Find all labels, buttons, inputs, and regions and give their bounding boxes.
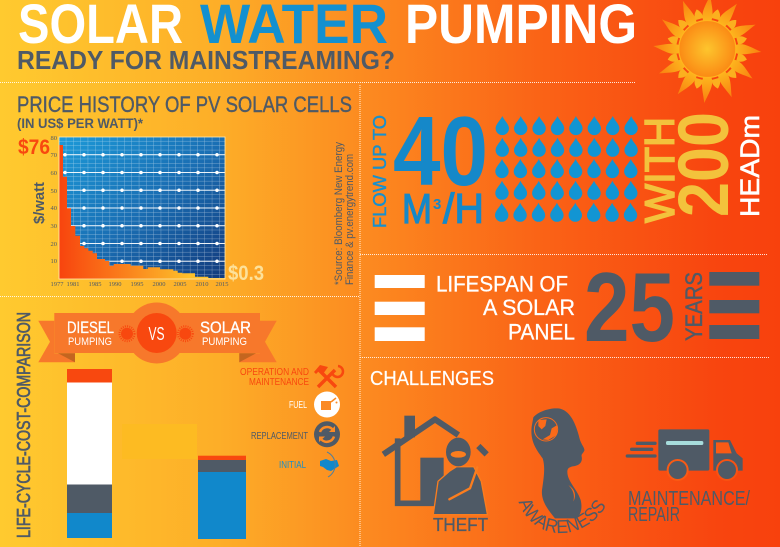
line chart: solar cell price: 1990 bbox=[108, 281, 122, 288]
challenges heading: CHALLENGES bbox=[370, 367, 494, 390]
ribbon: diesel vs solar: VS bbox=[148, 324, 164, 344]
icon: sun bbox=[653, 0, 761, 103]
line chart: solar cell price: 1985 bbox=[88, 281, 102, 288]
line chart: solar cell price: 2000 bbox=[152, 281, 166, 288]
ribbon: diesel vs solar: DIESEL bbox=[67, 319, 114, 337]
ribbon: diesel vs solar: PUMPING bbox=[68, 336, 112, 348]
ribbon: diesel vs solar: SOLAR bbox=[200, 319, 251, 337]
stat: 200: 200 bbox=[665, 112, 744, 217]
line chart: solar cell price: 50 bbox=[50, 188, 57, 195]
decorative grey bars bbox=[709, 272, 759, 339]
lifespan label: LIFESPAN OF bbox=[436, 272, 568, 297]
line chart: solar cell price: 1981 bbox=[66, 281, 80, 288]
line chart: solar cell price: 60 bbox=[50, 170, 57, 177]
line chart: solar cell price: 80 bbox=[50, 135, 57, 142]
label: flow up to: FLOW UP TO bbox=[369, 115, 390, 228]
lifespan label: A SOLAR bbox=[483, 295, 575, 320]
icon: theft bbox=[383, 416, 487, 514]
line chart: solar cell price: 2005 bbox=[174, 281, 186, 288]
legend: operation and maintenance: OPERATION AND bbox=[240, 367, 309, 378]
legend: operation and maintenance: MAINTENANCE bbox=[249, 377, 309, 388]
price history units: (IN US$ PER WATT)* bbox=[17, 115, 144, 131]
panel: challenges bbox=[370, 367, 750, 535]
bar: solar pumping bbox=[198, 456, 246, 539]
axis label: $/watt: $/watt bbox=[31, 182, 48, 224]
line chart: solar cell price bbox=[50, 135, 228, 288]
lifespan label bbox=[436, 272, 575, 344]
line chart: solar cell price: 30 bbox=[50, 223, 57, 230]
legend bbox=[240, 365, 343, 477]
line chart: solar cell price: 40 bbox=[50, 205, 57, 212]
price history heading: PRICE HISTORY OF PV SOLAR CELLS bbox=[17, 92, 352, 117]
vertical heading: LIFE-CYCLE-COST-COMPARISON bbox=[14, 312, 34, 538]
source note: *Source: Bloomberg New Energy bbox=[333, 142, 345, 285]
icon: truck bbox=[627, 429, 743, 481]
label: maintenance/repair bbox=[628, 488, 750, 526]
line chart: solar cell price: 1977 bbox=[50, 281, 64, 288]
source note bbox=[333, 142, 356, 285]
stat: 25: 25 bbox=[584, 252, 675, 362]
stat unit: m3/h: /H bbox=[443, 185, 484, 232]
line chart: solar cell price: 2015 bbox=[216, 281, 228, 288]
line chart: solar cell price: 2010 bbox=[196, 281, 208, 288]
callout: $0.3: $0.3 bbox=[228, 262, 264, 285]
decorative white bars bbox=[375, 275, 425, 341]
ribbon: diesel vs solar: PUMPING bbox=[202, 336, 247, 348]
label: awareness: AWARENESS bbox=[518, 500, 605, 534]
panel: flow and head bbox=[369, 96, 765, 232]
source note: Finance & pv.energytrend.com bbox=[344, 154, 356, 285]
label: maintenance/repair: MAINTENANCE/ bbox=[628, 488, 750, 510]
label: head in metres: HEADm bbox=[735, 115, 765, 217]
legend: initial: INITIAL bbox=[279, 460, 306, 471]
icon: water drop grid bbox=[495, 116, 638, 222]
stat unit: m3/h: M bbox=[402, 185, 432, 232]
line chart: solar cell price: 70 bbox=[50, 152, 57, 159]
bar: diesel pumping bbox=[67, 369, 112, 538]
callout: $76: $76 bbox=[18, 136, 50, 159]
legend: replacement: REPLACEMENT bbox=[251, 431, 308, 442]
label: with: WITH bbox=[636, 117, 683, 223]
panel: price history bbox=[17, 92, 356, 288]
label: maintenance/repair: REPAIR bbox=[628, 504, 680, 526]
line chart: solar cell price: 10 bbox=[50, 258, 57, 265]
label: years: YEARS bbox=[681, 272, 708, 341]
stat: 40: 40 bbox=[393, 96, 488, 206]
legend: fuel: FUEL bbox=[289, 400, 307, 411]
lifespan label: PANEL bbox=[508, 320, 575, 344]
label: theft: THEFT bbox=[433, 515, 488, 535]
stat unit: m3/h bbox=[402, 185, 484, 232]
panel: lifespan bbox=[375, 252, 759, 362]
ribbon: diesel vs solar bbox=[38, 302, 277, 364]
icon: awareness head bbox=[518, 408, 605, 534]
line chart: solar cell price: 1995 bbox=[130, 281, 144, 288]
subtitle: READY FOR MAINSTREAMING? bbox=[17, 45, 395, 75]
stat unit: m3/h: 3 bbox=[433, 196, 441, 213]
panel: life cycle cost comparison bbox=[14, 302, 343, 539]
legend: operation and maintenance bbox=[240, 365, 343, 388]
line chart: solar cell price: 20 bbox=[50, 241, 57, 248]
patch behind chart bbox=[122, 424, 197, 459]
title bbox=[18, 0, 637, 55]
